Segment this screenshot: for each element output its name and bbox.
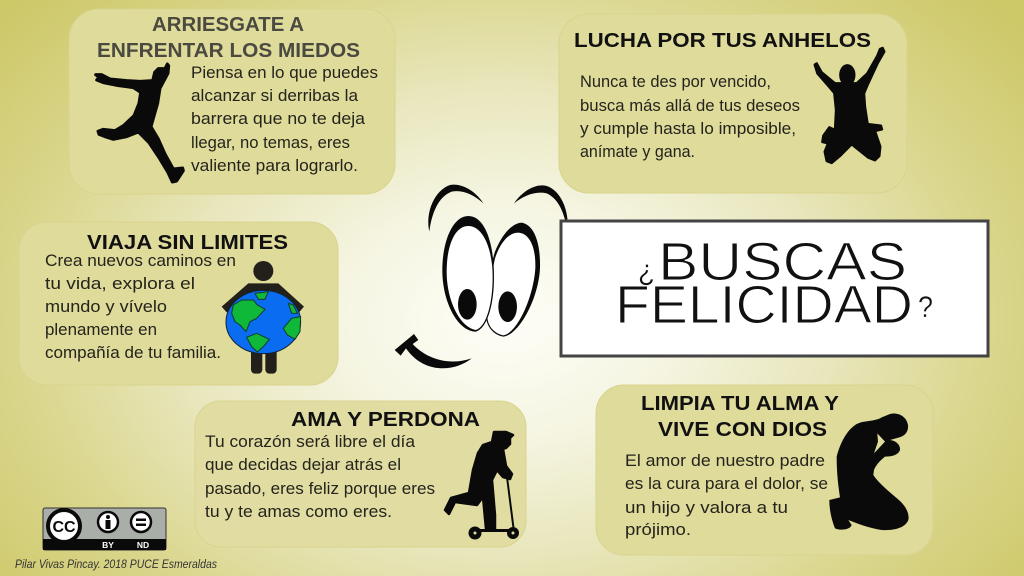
text: arriesgate body: valiente para lograrlo. bbox=[191, 157, 358, 175]
icon: jumping man silhouette bbox=[96, 64, 183, 182]
heading: limpia tu alma: LIMPIA TU ALMA Y bbox=[641, 393, 840, 415]
icon: right eyebrow bbox=[514, 185, 568, 232]
icon: smile bbox=[395, 334, 472, 368]
panel: ama y perdona bbox=[195, 401, 526, 547]
creative commons badge: BY bbox=[102, 540, 114, 550]
text: lucha body bbox=[580, 73, 800, 161]
heading: arriesgate: ENFRENTAR LOS MIEDOS bbox=[97, 40, 360, 62]
icon: old man on scooter bbox=[445, 432, 519, 540]
text: viaja body: plenamente en bbox=[45, 321, 157, 339]
text: arriesgate body: alcanzar si derribas la bbox=[191, 87, 359, 105]
text: ama body: pasado, eres feliz porque eres bbox=[205, 480, 435, 498]
icon: man with raised arms silhouette bbox=[815, 48, 884, 163]
title box bbox=[561, 221, 988, 356]
cartoon face bbox=[395, 185, 568, 368]
title text: BUSCAS bbox=[658, 232, 907, 292]
text: ama body: que decidas dejar atrás el bbox=[205, 456, 401, 474]
text: arriesgate body bbox=[191, 64, 378, 175]
text: limpia body: prójimo. bbox=[625, 521, 691, 539]
panel: viaja bbox=[19, 222, 338, 385]
panel: arriesgate bbox=[69, 9, 395, 194]
text: lucha body: y cumple hasta lo imposible, bbox=[580, 120, 796, 138]
creative commons badge: CC bbox=[52, 519, 76, 536]
heading: viaja: VIAJA SIN LIMITES bbox=[87, 232, 288, 254]
credit line: Pilar Vivas Pincay. 2018 PUCE Esmeraldas bbox=[15, 559, 217, 571]
text: viaja body bbox=[45, 252, 236, 362]
icon: left eye bbox=[442, 216, 494, 332]
panel: lucha bbox=[559, 14, 907, 193]
heading: limpia tu alma: VIVE CON DIOS bbox=[658, 419, 827, 441]
icon: right eye bbox=[486, 223, 540, 337]
icon: left eyebrow bbox=[428, 185, 483, 232]
panel: limpia tu alma bbox=[596, 385, 933, 555]
text: arriesgate body: llegar, no temas, eres bbox=[191, 134, 350, 152]
text: ama body bbox=[205, 433, 435, 521]
text: ama body: Tu corazón será libre el día bbox=[205, 433, 416, 451]
text: viaja body: compañía de tu familia. bbox=[45, 344, 221, 362]
title text: ¿ bbox=[638, 254, 655, 287]
text: lucha body: anímate y gana. bbox=[580, 143, 695, 161]
title text: FELICIDAD bbox=[615, 275, 913, 335]
text: viaja body: mundo y vívelo bbox=[45, 298, 167, 316]
creative commons badge bbox=[43, 508, 166, 550]
heading: lucha: LUCHA POR TUS ANHELOS bbox=[574, 30, 871, 52]
text: limpia body: un hijo y valora a tu bbox=[625, 499, 788, 517]
text: limpia body: El amor de nuestro padre bbox=[625, 452, 825, 470]
text: ama body: tu y te amas como eres. bbox=[205, 503, 392, 521]
text: viaja body: tu vida, explora el bbox=[45, 275, 195, 293]
text: limpia body: es la cura para el dolor, se bbox=[625, 475, 828, 493]
text: viaja body: Crea nuevos caminos en bbox=[45, 252, 236, 270]
heading: arriesgate bbox=[97, 14, 360, 62]
heading: limpia tu alma bbox=[641, 393, 840, 441]
icon: person hugging globe bbox=[222, 261, 304, 374]
title text bbox=[615, 232, 933, 335]
text: arriesgate body: barrera que no te deja bbox=[191, 110, 366, 128]
icon: kneeling praying man silhouette bbox=[829, 414, 909, 530]
text: lucha body: Nunca te des por vencido, bbox=[580, 73, 771, 91]
text: limpia body bbox=[625, 452, 828, 539]
heading: ama y perdona: AMA Y PERDONA bbox=[291, 409, 480, 431]
text: lucha body: busca más allá de tus deseos bbox=[580, 97, 800, 115]
text: arriesgate body: Piensa en lo que puedes bbox=[191, 64, 378, 82]
creative commons badge: ND bbox=[137, 540, 149, 550]
heading: arriesgate: ARRIESGATE A bbox=[152, 14, 304, 36]
title text: ? bbox=[918, 291, 933, 324]
